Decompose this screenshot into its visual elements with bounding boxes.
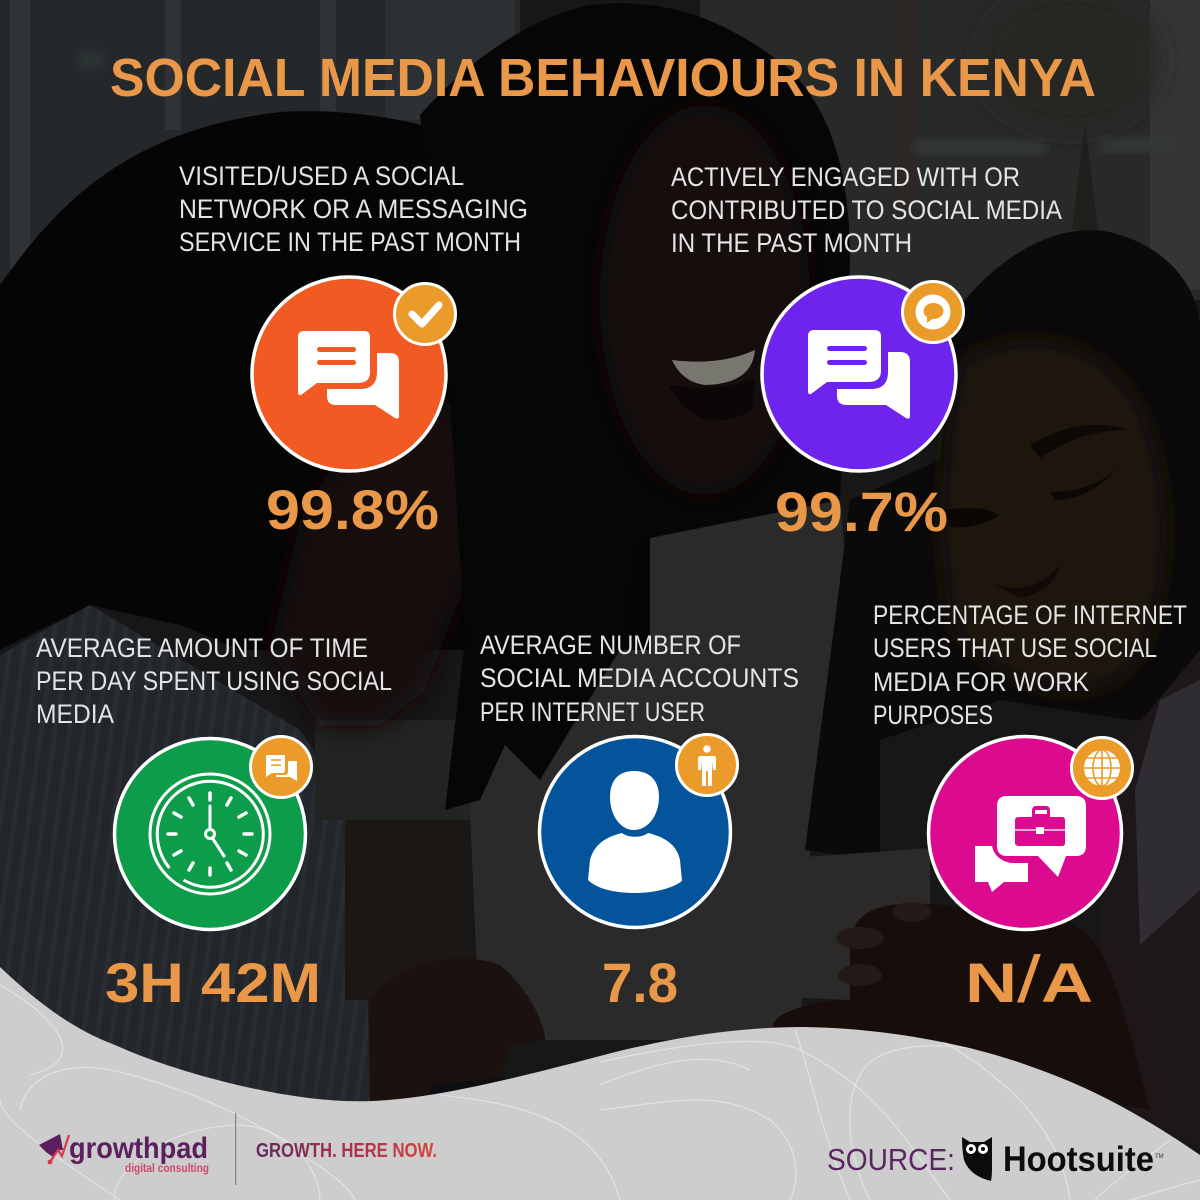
icon: figure badge	[676, 734, 738, 796]
man shirt	[0, 605, 370, 1110]
slogan: GROWTH. HERE NOW.	[256, 1140, 437, 1162]
text block: accounts label: PER INTERNET USER	[480, 697, 705, 727]
text block: time label	[36, 633, 392, 729]
icon: orange chat circle	[252, 277, 446, 471]
text block: engaged label: ACTIVELY ENGAGED WITH OR	[671, 162, 1020, 192]
text block: accounts label	[480, 630, 799, 727]
smile	[672, 350, 755, 385]
value: 99.8%: 99.8%	[266, 478, 439, 541]
text block: visited label	[179, 161, 528, 257]
source credit: SOURCE:	[827, 1142, 955, 1177]
centre woman's hand	[370, 958, 545, 1110]
icon: blue person circle	[540, 736, 730, 928]
man face	[270, 399, 479, 725]
icon: speech badge	[902, 282, 964, 342]
text block: visited label: SERVICE IN THE PAST MONTH	[179, 227, 521, 257]
icon: chat badge	[250, 736, 312, 798]
text block: engaged label: IN THE PAST MONTH	[671, 228, 912, 258]
source credit: TM	[1155, 1154, 1164, 1160]
logo: growthpad digital consulting: digital consulting	[125, 1163, 209, 1175]
text block: visited label: NETWORK OR A MESSAGING	[179, 194, 528, 224]
text block: work label: PURPOSES	[873, 700, 993, 730]
panel: time per day	[36, 633, 392, 1014]
tablet	[733, 848, 930, 1000]
panel: work purposes	[873, 600, 1187, 1016]
building top-left	[0, 0, 520, 300]
icon: purple chat circle	[762, 277, 956, 471]
right woman hair	[805, 230, 1200, 860]
hand holding tablet	[773, 904, 1150, 1110]
value: 7.8: 7.8	[602, 951, 678, 1014]
centre woman hair	[420, 3, 850, 810]
icon: check badge	[394, 284, 456, 344]
panel: visited or used social network	[179, 161, 528, 541]
title: SOCIAL MEDIA BEHAVIOURS IN KENYA	[110, 48, 1096, 108]
logo: growthpad digital consulting: growthpad	[69, 1132, 208, 1165]
value: N/A: N/A	[965, 942, 1093, 1016]
text block: work label	[873, 600, 1187, 730]
building and tree top-right	[700, 0, 1200, 300]
text block: time label: PER DAY SPENT USING SOCIAL	[36, 666, 392, 696]
value: 3H 42M: 3H 42M	[105, 951, 321, 1014]
text block: accounts label: SOCIAL MEDIA ACCOUNTS	[480, 663, 799, 693]
centre woman shirt	[465, 500, 860, 1040]
icon: owl logo	[962, 1137, 992, 1181]
logo: growthpad digital consulting	[39, 1132, 209, 1175]
text block: visited label: VISITED/USED A SOCIAL	[179, 161, 464, 191]
background behind man	[315, 720, 475, 820]
text block: work label: MEDIA FOR WORK	[873, 667, 1089, 697]
icon: green clock circle	[114, 738, 306, 930]
man hair	[0, 111, 650, 650]
text block: engaged label: CONTRIBUTED TO SOCIAL MEDIA	[671, 195, 1062, 225]
panel: accounts per user	[480, 630, 799, 1014]
right woman face	[941, 340, 1166, 692]
icon: growthpad mark	[39, 1134, 69, 1164]
panel: actively engaged	[671, 162, 1062, 543]
text block: time label: AVERAGE AMOUNT OF TIME	[36, 633, 368, 663]
icon: globe badge	[1072, 738, 1132, 798]
right woman's shirt	[1100, 650, 1200, 1150]
text block: engaged label	[671, 162, 1062, 258]
source credit	[827, 1137, 1164, 1181]
bottom wave panel	[0, 967, 1200, 1200]
value: 99.7%: 99.7%	[775, 480, 948, 543]
centre woman face	[600, 105, 810, 495]
text block: time label: MEDIA	[36, 699, 114, 729]
icon: magenta briefcase chat circle	[928, 736, 1122, 930]
source credit: Hootsuite	[1003, 1140, 1154, 1179]
text block: accounts label: AVERAGE NUMBER OF	[480, 630, 741, 660]
